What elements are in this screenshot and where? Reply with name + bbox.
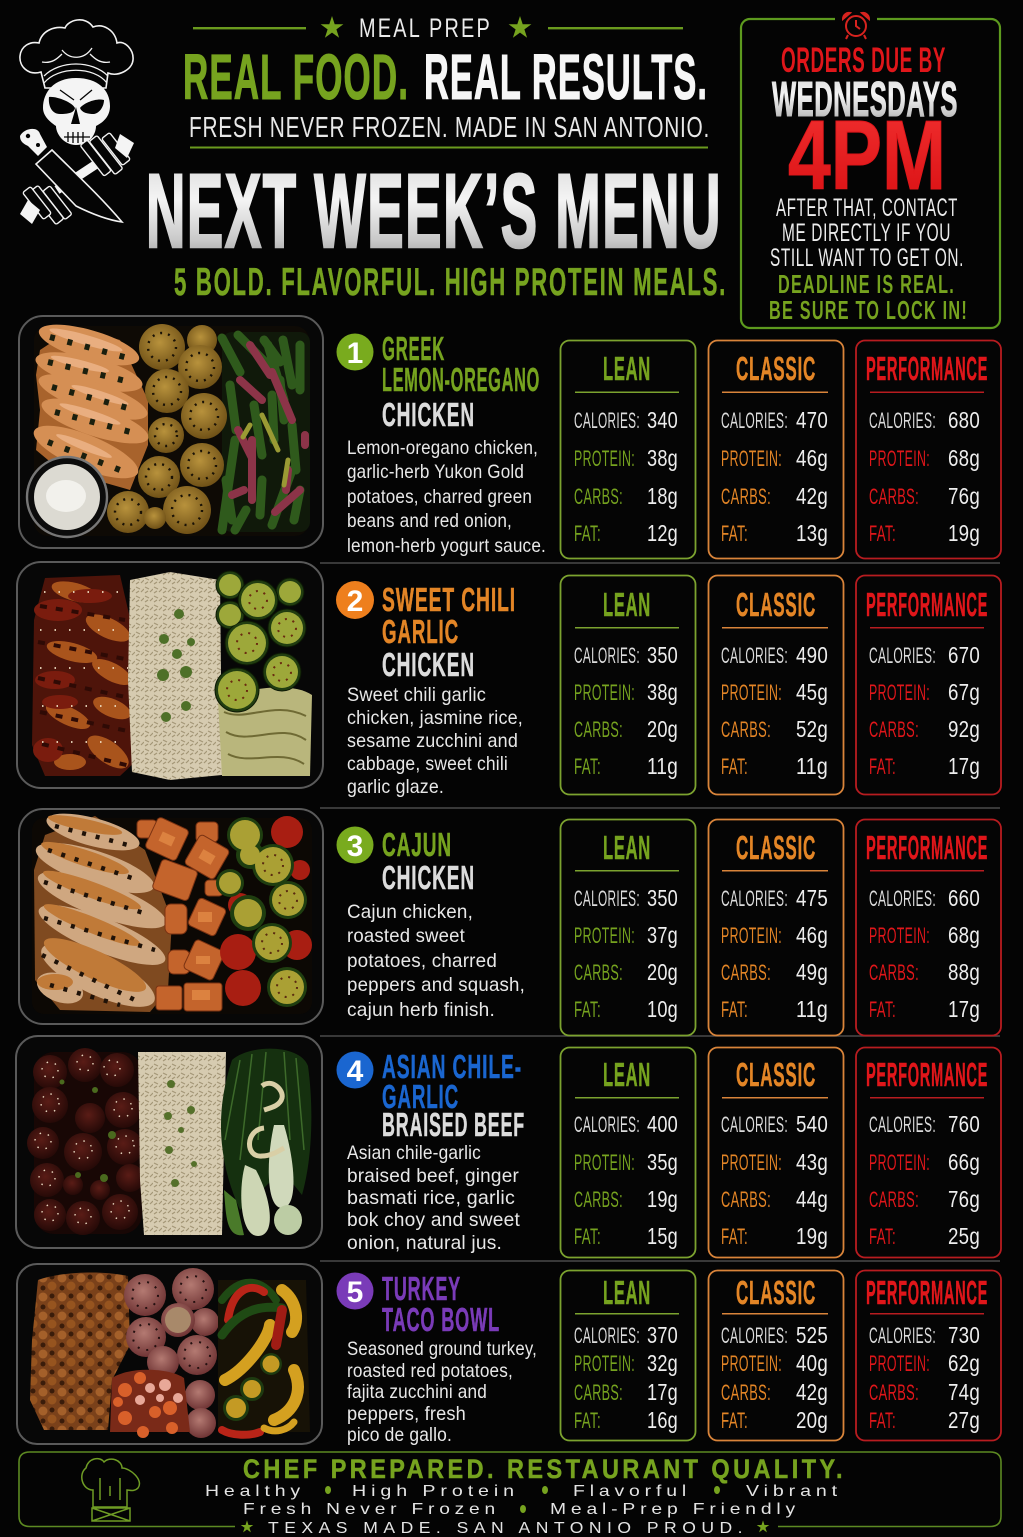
- meal 3 performance panel: [856, 820, 1001, 1036]
- meal 5 classic panel: 42g: [796, 1379, 828, 1405]
- meal 5 title: TURKEY: [382, 1270, 461, 1307]
- meal 2 description: garlic glaze.: [347, 776, 444, 798]
- meal 2 classic panel: FAT:: [721, 754, 748, 779]
- meal 1 description: beans and red onion,: [347, 510, 512, 532]
- meal 4 lean panel: 15g: [647, 1223, 678, 1249]
- meal 2 description: cabbage, sweet chili: [347, 753, 508, 775]
- meal 2 performance panel: [856, 576, 1001, 794]
- meal 4 title: [382, 1048, 525, 1143]
- meal 4 lean panel: 19g: [647, 1186, 678, 1212]
- meal 4 lean panel: CARBS:: [574, 1187, 623, 1212]
- panel: footer banner: Meal-Prep Friendly: [550, 1501, 800, 1518]
- meal 5 lean panel: FAT:: [574, 1408, 601, 1433]
- meal 2 performance panel: CARBS:: [869, 717, 919, 742]
- meal 2 classic panel: CALORIES:: [721, 643, 788, 668]
- meal 5 lean panel: CARBS:: [574, 1380, 623, 1405]
- meal 1 description: lemon-herb yogurt sauce.: [347, 535, 546, 557]
- meal 4 lean panel: PROTEIN:: [574, 1150, 635, 1175]
- meal 2 lean panel: 20g: [647, 716, 678, 742]
- meal 5 classic panel: 525: [796, 1322, 828, 1348]
- header: meal prep kicker: MEAL PREP: [359, 13, 492, 43]
- meal 5 performance panel: CALORIES:: [869, 1323, 936, 1348]
- meal 3 classic panel: 475: [796, 885, 828, 911]
- meal 4 classic panel: CALORIES:: [721, 1112, 788, 1137]
- meal 3 performance panel: 660: [948, 885, 980, 911]
- meal 4 classic panel: 19g: [796, 1223, 828, 1249]
- meal 4 badge: [336, 1052, 374, 1088]
- meal 1 lean panel: [560, 340, 696, 558]
- panel: footer banner: TEXAS MADE. SAN ANTONIO PROUD.: [268, 1520, 748, 1537]
- header: meal prep kicker: [193, 13, 683, 43]
- meal 5 classic panel: CALORIES:: [721, 1323, 788, 1348]
- meal 3 performance panel: 88g: [948, 959, 980, 985]
- meal 1 lean panel: 38g: [647, 445, 678, 471]
- meal 4 lean panel: FAT:: [574, 1224, 601, 1249]
- meal 4 classic panel: PROTEIN:: [721, 1150, 782, 1175]
- meal 5 performance panel: 74g: [948, 1379, 980, 1405]
- meal 5 classic panel: CLASSIC: [736, 1274, 816, 1311]
- meal 1 description: Lemon-oregano chicken,: [347, 437, 538, 459]
- meal 2 classic panel: [708, 576, 844, 794]
- meal 3 classic panel: CALORIES:: [721, 886, 788, 911]
- meal 1 performance panel: PROTEIN:: [869, 446, 930, 471]
- meal 5 performance panel: CARBS:: [869, 1380, 919, 1405]
- meal 3 food tray: [19, 806, 323, 1024]
- meal 2 classic panel: 52g: [796, 716, 828, 742]
- meal 2 lean panel: PROTEIN:: [574, 680, 635, 705]
- meal 4 classic panel: [708, 1048, 844, 1258]
- meal 5 title: TACO BOWL: [382, 1301, 500, 1338]
- meal 1 lean panel: 12g: [647, 520, 678, 546]
- meal 4 lean panel: CALORIES:: [574, 1112, 640, 1137]
- meal 2 description: Sweet chili garlic: [347, 684, 486, 706]
- meal 1 classic panel: CALORIES:: [721, 408, 788, 433]
- meal 2 classic panel: 490: [796, 642, 828, 668]
- meal 5 classic panel: [708, 1270, 844, 1440]
- meal 3 lean panel: CARBS:: [574, 960, 623, 985]
- meal 2 performance panel: PROTEIN:: [869, 680, 930, 705]
- meal 2 lean panel: CALORIES:: [574, 643, 640, 668]
- meal 3 title: CHICKEN: [382, 859, 475, 896]
- meal 3 lean panel: FAT:: [574, 997, 601, 1022]
- meal 4 title: GARLIC: [382, 1078, 459, 1115]
- meal 1 lean panel: CARBS:: [574, 484, 623, 509]
- meal 1 performance panel: CARBS:: [869, 484, 919, 509]
- panel: footer banner: Flavorful: [573, 1483, 691, 1500]
- meal 4 lean panel: [560, 1048, 696, 1258]
- headline: real food real results: REAL RESULTS.: [424, 41, 708, 113]
- meal 1 description: potatoes, charred green: [347, 486, 532, 508]
- meal 5 classic panel: PROTEIN:: [721, 1351, 782, 1376]
- meal 5 lean panel: 370: [647, 1322, 678, 1348]
- meal 4 lean panel: 35g: [647, 1149, 678, 1175]
- meal 2 lean panel: LEAN: [603, 586, 651, 623]
- meal 3 classic panel: 11g: [796, 996, 828, 1022]
- meal 1 description: [347, 437, 546, 557]
- meal 5 description: [347, 1338, 537, 1446]
- meal 1 title: [382, 330, 540, 433]
- meal 2 classic panel: 11g: [796, 753, 828, 779]
- meal 4 performance panel: 25g: [948, 1223, 980, 1249]
- meal 2 lean panel: [560, 576, 696, 794]
- meal 5 lean panel: LEAN: [603, 1274, 651, 1311]
- meal 5 lean panel: 32g: [647, 1350, 678, 1376]
- meal 1 lean panel: PROTEIN:: [574, 446, 635, 471]
- meal 4 classic panel: CLASSIC: [736, 1056, 816, 1093]
- meal 1 performance panel: FAT:: [869, 521, 896, 546]
- meal 2 title: [382, 581, 516, 683]
- meal 2 performance panel: FAT:: [869, 754, 896, 779]
- meal 1 performance panel: [856, 340, 1001, 558]
- meal 3 badge: [336, 826, 374, 864]
- meal 5 lean panel: CALORIES:: [574, 1323, 640, 1348]
- meal 4 classic panel: 44g: [796, 1186, 828, 1212]
- meal 2 lean panel: 350: [647, 642, 678, 668]
- meal 4 description: basmati rice, garlic: [347, 1187, 515, 1209]
- meal 5 food tray: [17, 1264, 322, 1444]
- meal 1 lean panel: 340: [647, 407, 678, 433]
- meal 2 title: CHICKEN: [382, 646, 475, 683]
- meal 4 performance panel: CALORIES:: [869, 1112, 936, 1137]
- meal 5 classic panel: 20g: [796, 1407, 828, 1433]
- meal 3 description: cajun herb finish.: [347, 999, 495, 1021]
- meal 2 lean panel: 11g: [647, 753, 678, 779]
- meal 1 classic panel: 42g: [796, 483, 828, 509]
- meal 2 performance panel: 17g: [948, 753, 980, 779]
- panel: order deadline: [741, 10, 1000, 328]
- panel: order deadline: 4PM: [788, 100, 946, 210]
- meal 3 description: peppers and squash,: [347, 974, 525, 996]
- text: LEMON-OREGANO: [382, 361, 540, 398]
- icon: chef hat: [82, 1459, 139, 1521]
- meal 5 performance panel: PROTEIN:: [869, 1351, 930, 1376]
- meal 3 classic panel: [708, 820, 844, 1036]
- meal 3 lean panel: [560, 820, 696, 1036]
- meal 3 lean panel: 37g: [647, 922, 678, 948]
- meal 3 description: roasted sweet: [347, 925, 465, 947]
- meal 4 classic panel: FAT:: [721, 1224, 748, 1249]
- meal 2 performance panel: 92g: [948, 716, 980, 742]
- meal 1 performance panel: CALORIES:: [869, 408, 936, 433]
- meal 2 classic panel: PROTEIN:: [721, 680, 782, 705]
- meal 5 classic panel: FAT:: [721, 1408, 748, 1433]
- meal 4 classic panel: CARBS:: [721, 1187, 771, 1212]
- meal 2 lean panel: CARBS:: [574, 717, 623, 742]
- meal 3 lean panel: 20g: [647, 959, 678, 985]
- meal 2 performance panel: 670: [948, 642, 980, 668]
- meal 4 performance panel: PROTEIN:: [869, 1150, 930, 1175]
- meal 3 description: [347, 901, 525, 1021]
- meal 3 lean panel: CALORIES:: [574, 886, 640, 911]
- meal 1 lean panel: LEAN: [603, 350, 651, 387]
- meal 3 classic panel: FAT:: [721, 997, 748, 1022]
- meal 3 badge: 3: [347, 830, 363, 863]
- meal 1 performance panel: 680: [948, 407, 980, 433]
- meal 5 classic panel: CARBS:: [721, 1380, 771, 1405]
- meal 3 classic panel: CARBS:: [721, 960, 771, 985]
- meal 4 performance panel: FAT:: [869, 1224, 896, 1249]
- meal 1 classic panel: [708, 340, 844, 558]
- meal 4 description: [347, 1142, 520, 1254]
- panel: footer banner: Healthy: [205, 1483, 305, 1500]
- meal 3 performance panel: 17g: [948, 996, 980, 1022]
- meal 3 performance panel: PROTEIN:: [869, 923, 930, 948]
- meal 4 classic panel: 43g: [796, 1149, 828, 1175]
- meal 3 performance panel: FAT:: [869, 997, 896, 1022]
- meal 3 lean panel: LEAN: [603, 829, 651, 866]
- meal 4 performance panel: [856, 1048, 1001, 1258]
- meal 4 performance panel: CARBS:: [869, 1187, 919, 1212]
- meal 1 classic panel: PROTEIN:: [721, 446, 782, 471]
- meal 2 description: sesame zucchini and: [347, 730, 518, 752]
- meal 1 lean panel: CALORIES:: [574, 408, 640, 433]
- meal 4 description: Asian chile-garlic: [347, 1142, 481, 1164]
- meal 1 classic panel: CLASSIC: [736, 350, 816, 387]
- logo: skull chef with knife and dumbbell: [20, 20, 134, 225]
- meal 1 title: CHICKEN: [382, 396, 475, 433]
- meal 3 classic panel: 49g: [796, 959, 828, 985]
- meal 3 classic panel: PROTEIN:: [721, 923, 782, 948]
- meal 2 classic panel: CARBS:: [721, 717, 771, 742]
- meal 5 badge: 5: [347, 1276, 363, 1309]
- meal 1 lean panel: FAT:: [574, 521, 601, 546]
- meal 1 description: garlic-herb Yukon Gold: [347, 461, 524, 483]
- meal 4 title: BRAISED BEEF: [382, 1106, 525, 1143]
- panel: footer banner: CHEF PREPARED. RESTAURANT QUALITY.: [243, 1454, 846, 1484]
- meal 4 title: ASIAN CHILE-: [382, 1048, 522, 1085]
- meal 2 badge: 2: [347, 585, 363, 618]
- meal 4 food tray: [16, 1036, 322, 1248]
- meal 4 lean panel: 400: [647, 1111, 678, 1137]
- meal 2 lean panel: FAT:: [574, 754, 601, 779]
- meal 1 food tray: [19, 316, 323, 548]
- meal 1 classic panel: 13g: [796, 520, 828, 546]
- meal 4 performance panel: 66g: [948, 1149, 980, 1175]
- meal 3 title: CAJUN: [382, 826, 452, 863]
- meal 5 classic panel: 40g: [796, 1350, 828, 1376]
- headline: real food real results: REAL FOOD.: [183, 41, 409, 113]
- meal 5 badge: [336, 1272, 374, 1310]
- meal 3 performance panel: CARBS:: [869, 960, 919, 985]
- meal 4 description: bok choy and sweet: [347, 1209, 520, 1231]
- meal 5 description: roasted red potatoes,: [347, 1360, 513, 1382]
- meal 2 description: [347, 684, 523, 798]
- meal 1 performance panel: 68g: [948, 445, 980, 471]
- icon: alarm clock: [843, 13, 869, 39]
- meal 5 description: Seasoned ground turkey,: [347, 1338, 537, 1360]
- meal 3 description: potatoes, charred: [347, 950, 497, 972]
- meal 3 lean panel: PROTEIN:: [574, 923, 635, 948]
- meal 5 lean panel: 17g: [647, 1379, 678, 1405]
- meal 5 performance panel: 27g: [948, 1407, 980, 1433]
- meal 2 classic panel: 45g: [796, 679, 828, 705]
- meal 5 lean panel: PROTEIN:: [574, 1351, 635, 1376]
- meal 2 performance panel: 67g: [948, 679, 980, 705]
- meal 2 classic panel: CLASSIC: [736, 586, 816, 623]
- meal 5 performance panel: FAT:: [869, 1408, 896, 1433]
- meal 5 lean panel: [560, 1270, 696, 1440]
- meal 2 badge: [336, 581, 374, 619]
- meal 1 classic panel: 470: [796, 407, 828, 433]
- panel: footer banner: High Protein: [352, 1483, 519, 1500]
- meal 3 title: [382, 826, 475, 896]
- meal 4 lean panel: LEAN: [603, 1056, 651, 1093]
- meal 4 classic panel: 540: [796, 1111, 828, 1137]
- subheading: FRESH NEVER FROZEN. MADE IN SAN ANTONIO.: [189, 112, 710, 144]
- panel: footer banner: Fresh Never Frozen: [243, 1501, 500, 1518]
- meal 4 description: onion, natural jus.: [347, 1232, 502, 1254]
- meal 2 lean panel: 38g: [647, 679, 678, 705]
- meal 1 performance panel: 76g: [948, 483, 980, 509]
- meal 3 lean panel: 10g: [647, 996, 678, 1022]
- meal 4 performance panel: 76g: [948, 1186, 980, 1212]
- meal 2 description: chicken, jasmine rice,: [347, 707, 523, 729]
- meal 3 description: Cajun chicken,: [347, 901, 473, 923]
- panel: footer banner: [19, 1452, 1001, 1537]
- meal 3 classic panel: CLASSIC: [736, 829, 816, 866]
- meal 1 title: GREEK: [382, 330, 445, 367]
- panel: footer banner: Vibrant: [746, 1483, 842, 1500]
- meal 1 classic panel: 46g: [796, 445, 828, 471]
- meal 4 description: braised beef, ginger: [347, 1165, 519, 1187]
- meal 5 description: pico de gallo.: [347, 1424, 452, 1446]
- meal 1 performance panel: 19g: [948, 520, 980, 546]
- meal 1 badge: 1: [347, 337, 363, 370]
- meal 5 title: [382, 1270, 500, 1338]
- meal 5 performance panel: 62g: [948, 1350, 980, 1376]
- meal 5 lean panel: 16g: [647, 1407, 678, 1433]
- meal 5 description: peppers, fresh: [347, 1403, 466, 1425]
- meal 1 badge: [336, 334, 374, 370]
- meal 1 classic panel: CARBS:: [721, 484, 771, 509]
- meal 3 lean panel: 350: [647, 885, 678, 911]
- meal 4 badge: 4: [347, 1055, 364, 1088]
- meal 1 classic panel: FAT:: [721, 521, 748, 546]
- meal 3 classic panel: 46g: [796, 922, 828, 948]
- meal 2 title: SWEET CHILI: [382, 581, 516, 618]
- meal 2 performance panel: CALORIES:: [869, 643, 936, 668]
- meal 2 food tray: [17, 562, 323, 788]
- meal 5 description: fajita zucchini and: [347, 1381, 487, 1403]
- meal 5 performance panel: 730: [948, 1322, 980, 1348]
- meal 5 performance panel: [856, 1270, 1001, 1440]
- meal 1 lean panel: 18g: [647, 483, 678, 509]
- meal 2 title: GARLIC: [382, 613, 459, 650]
- meal 4 performance panel: 760: [948, 1111, 980, 1137]
- meal 3 performance panel: 68g: [948, 922, 980, 948]
- meal 3 performance panel: CALORIES:: [869, 886, 936, 911]
